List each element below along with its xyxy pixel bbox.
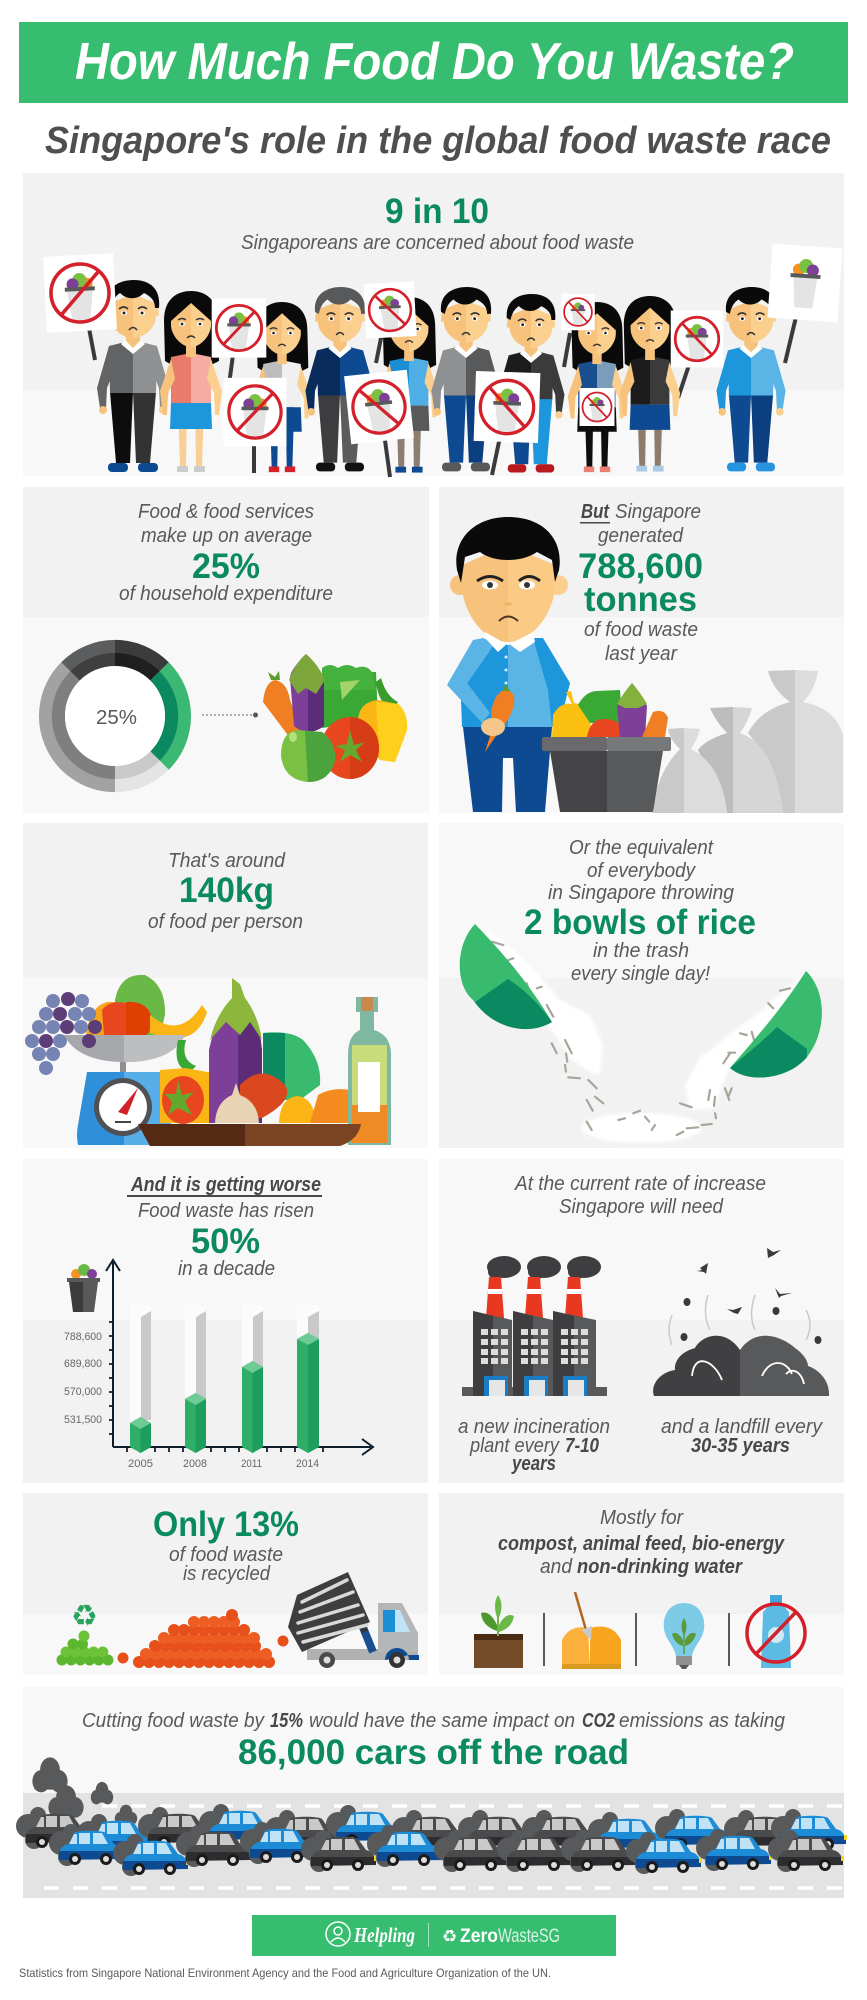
illustration: landfill with birds (653, 1248, 829, 1396)
illustration: incineration plant (462, 1256, 607, 1396)
text: rate of increase: Singapore will need (559, 1196, 724, 1218)
text: per person: That's around (168, 850, 286, 872)
text: tonnes generated: Singapore (615, 501, 701, 523)
text: tonnes generated: generated (598, 525, 684, 547)
text: rice equivalent (524, 837, 756, 985)
stat: 9 in 10: 9 in 10 (385, 192, 489, 231)
icon: bio-energy bulb (664, 1603, 704, 1669)
source note: Statistics from Singapore National Environment Agency and the Food and Agriculture Organization of the UN. (19, 1966, 551, 1980)
text: uses of recycled waste: and (540, 1556, 573, 1578)
text: landfill: and a landfill every (661, 1416, 823, 1438)
panel: getting worse (23, 1159, 428, 1483)
panel: 140kg per person (23, 823, 428, 1148)
text: per person: of food per person (148, 911, 303, 933)
panel: incineration and landfill (439, 1159, 844, 1483)
title banner (19, 22, 848, 103)
text: recycled share: Only 13% (153, 1505, 299, 1544)
logo: Helpling (326, 1922, 415, 1947)
text: getting worse: And it is getting worse (130, 1174, 321, 1196)
text: tonnes generated: last year (605, 643, 678, 665)
text: tonnes generated: 788,600 (578, 547, 703, 586)
text: tonnes generated: tonnes (584, 580, 697, 619)
text: rice equivalent: of everybody (587, 860, 696, 882)
illustration: traffic jam (16, 1804, 847, 1876)
text: per person: 140kg (179, 871, 274, 910)
illustration: exhaust smoke (32, 1757, 137, 1825)
logo: ZeroWasteSG: ♻ (442, 1927, 457, 1947)
chart: food waste bars: 531,500 (64, 1414, 102, 1426)
text: rice equivalent: 2 bowls of rice (524, 903, 756, 942)
panel: only 13% recycled (23, 1493, 428, 1675)
text: uses of recycled waste: Mostly for (600, 1507, 684, 1529)
text: incineration plant: a new incineration (458, 1416, 610, 1438)
chart: food waste bars (64, 1260, 373, 1470)
panel: household expenditure (23, 487, 429, 813)
chart: food waste bars: 788,600 (64, 1331, 102, 1343)
text: rate of increase (514, 1173, 766, 1218)
chart: 25% donut (46, 646, 184, 786)
illustration: orange pile (118, 1615, 288, 1664)
illustration: scale and groceries (25, 975, 391, 1146)
panel: 2 bowls of rice (439, 823, 844, 1148)
illustration: bin with food (542, 683, 671, 812)
logo: Helpling: Helpling (353, 1923, 415, 1947)
divider line (428, 1923, 429, 1947)
panel: cars off the road (16, 1687, 847, 1898)
text: rate of increase: At the current rate of increase (514, 1173, 766, 1195)
illustration: tipper truck (288, 1572, 419, 1668)
icon: food bin (67, 1264, 100, 1312)
text: cutting food waste: 15% (270, 1710, 303, 1732)
chart: food waste bars: 570,000 (64, 1386, 102, 1398)
illustration: garbage bags (653, 670, 843, 813)
text: rice equivalent: every single day! (571, 963, 710, 985)
text: rice equivalent: in the trash (593, 940, 689, 962)
connector: dotted line (202, 712, 258, 718)
illustration: worried man (447, 517, 570, 812)
text: tonnes generated (578, 501, 703, 665)
text: landfill: 30-35 years (691, 1435, 790, 1457)
text: uses of recycled waste: compost, animal feed, bio-energy (498, 1533, 785, 1555)
chart: 25% donut: 25% (96, 707, 137, 729)
text: per person (148, 850, 303, 933)
text: uses of recycled waste (498, 1507, 785, 1578)
panel: mostly for (439, 1493, 844, 1675)
text: cutting food waste (82, 1710, 785, 1732)
icon: animal feed hay (562, 1592, 621, 1669)
text: cutting food waste: emissions as taking (619, 1710, 785, 1732)
text: recycled share: of food waste (169, 1544, 283, 1566)
text: rice equivalent: in Singapore throwing (548, 882, 734, 904)
text: tonnes generated: But (581, 501, 610, 523)
road markings (44, 1806, 845, 1888)
text: rice equivalent: Or the equivalent (569, 837, 714, 859)
title banner: How Much Food Do You Waste? (75, 33, 794, 91)
text: recycled share (153, 1505, 299, 1585)
text: food share: Food & food services (138, 501, 314, 523)
chart: food waste bars: 2005 (128, 1458, 153, 1470)
text: food share (119, 501, 333, 605)
illustration: rice pouring (460, 924, 822, 1143)
text: incineration plant: plant every (469, 1435, 560, 1457)
chart: food waste bars: 2008 (183, 1458, 207, 1470)
text: incineration plant: years (511, 1453, 556, 1475)
logo: ZeroWasteSG: Zero (460, 1926, 498, 1947)
caption: concern: Singaporeans are concerned about food waste (241, 232, 634, 254)
stat: 86,000 cars: 86,000 cars off the road (238, 1733, 629, 1772)
text: incineration plant (458, 1416, 610, 1475)
text: cutting food waste: Cutting food waste by (82, 1710, 265, 1732)
text: getting worse: 50% (191, 1222, 260, 1261)
chart: food waste bars: 2014 (296, 1458, 319, 1470)
illustration: green pile (62, 1636, 108, 1660)
chart: food waste bars: 689,800 (64, 1358, 102, 1370)
text: getting worse: in a decade (178, 1258, 275, 1280)
text: cutting food waste: would have the same impact on (309, 1710, 575, 1732)
illustration: vegetables (263, 654, 407, 782)
panel: 9 in 10 concerned (23, 173, 844, 477)
text: cutting food waste: CO2 (582, 1710, 615, 1732)
divider line (728, 1613, 730, 1666)
icon: compost plant (474, 1595, 523, 1668)
chart: food waste bars: 2011 (241, 1458, 262, 1470)
logo: ZeroWasteSG: WasteSG (498, 1926, 560, 1947)
subtitle: Singapore's role in the global food waste race (45, 120, 831, 162)
text: food share: of household expenditure (119, 583, 333, 605)
illustration: protesting crowd (43, 244, 842, 477)
text: food share: 25% (192, 547, 260, 586)
icon: no drinking water (747, 1595, 805, 1668)
text: incineration plant: 7-10 (565, 1435, 599, 1457)
text: tonnes generated: of food waste (584, 619, 698, 641)
divider line (543, 1613, 545, 1666)
logo: ZeroWasteSG (442, 1926, 560, 1947)
text: getting worse (127, 1174, 322, 1280)
text: recycled share: is recycled (183, 1563, 271, 1585)
text: landfill (661, 1416, 823, 1457)
footer: logo bar (252, 1915, 616, 1956)
divider line (635, 1613, 637, 1666)
panel: 788,600 tonnes (439, 487, 844, 813)
text: uses of recycled waste: non-drinking water (577, 1556, 743, 1578)
text: getting worse: Food waste has risen (138, 1200, 314, 1222)
text: food share: make up on average (141, 525, 312, 547)
icon: recycle symbol: ♻ (71, 1599, 98, 1634)
